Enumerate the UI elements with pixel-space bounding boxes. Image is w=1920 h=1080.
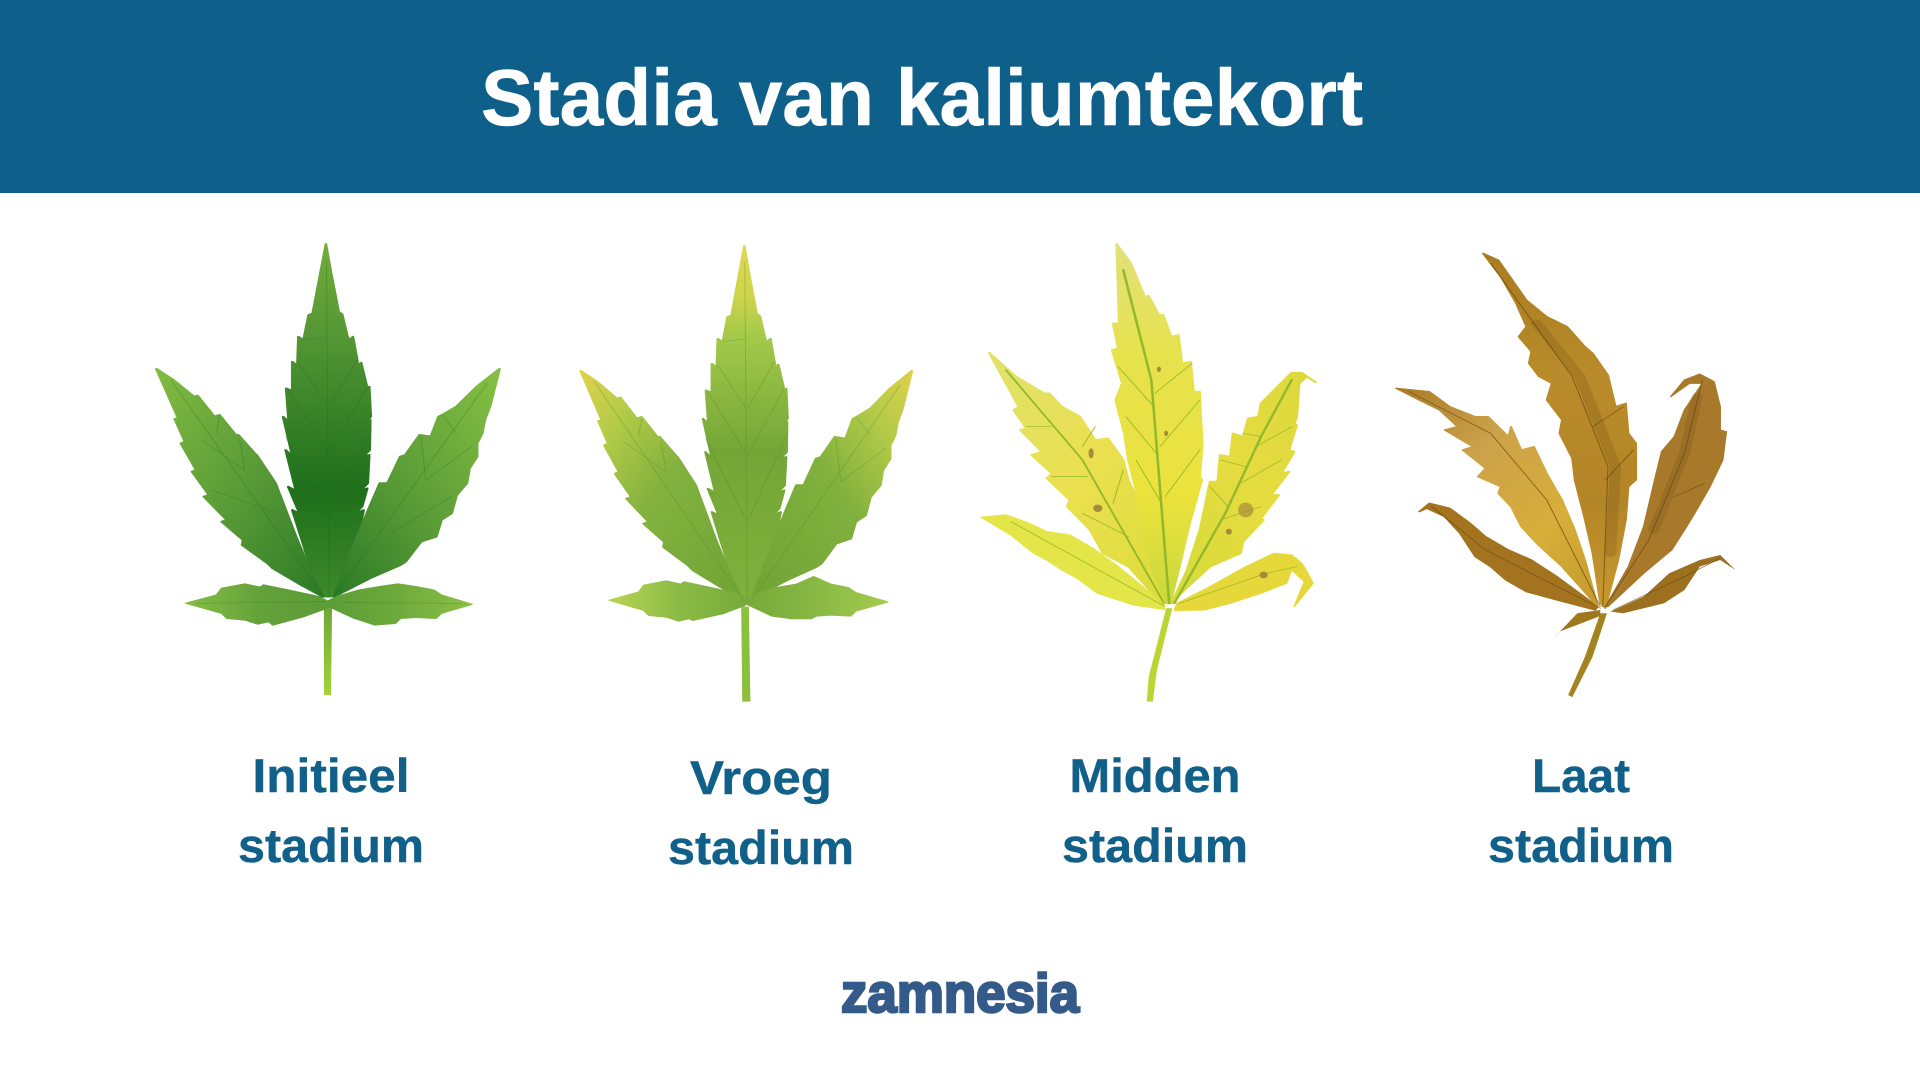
lower right leaflet bbox=[324, 584, 472, 625]
veins bbox=[1409, 263, 1720, 610]
lower right leaflet bbox=[742, 577, 888, 619]
left leaflet bbox=[989, 353, 1165, 603]
lower stub leaflet bbox=[1552, 610, 1600, 640]
lower left leaflet bbox=[981, 515, 1164, 609]
veins bbox=[595, 262, 900, 599]
right leaflet bbox=[1605, 374, 1726, 607]
right leaflet bbox=[334, 369, 499, 597]
label: initial stage bbox=[238, 749, 424, 872]
veins bbox=[1006, 270, 1297, 606]
lower right leaflet bbox=[1611, 555, 1736, 613]
centre leaflet bbox=[1112, 244, 1202, 603]
lower left leaflet bbox=[186, 584, 332, 625]
label: initial stage: stadium bbox=[238, 819, 424, 872]
label: early stage bbox=[668, 751, 854, 874]
centre leaflet bbox=[1483, 253, 1636, 608]
stem bbox=[741, 607, 750, 702]
label: middle stage bbox=[1062, 749, 1248, 872]
label: middle stage: Midden bbox=[1070, 749, 1240, 802]
centre leaflet bbox=[283, 244, 371, 597]
stem bbox=[324, 607, 332, 695]
right leaflet bbox=[752, 371, 912, 599]
title: Stadia van kaliumtekort bbox=[481, 53, 1363, 142]
logo: zamnesia: zamnesia bbox=[841, 962, 1079, 1024]
label: initial stage: Initieel bbox=[252, 749, 410, 802]
header band bbox=[0, 0, 1920, 193]
left leaflet bbox=[1396, 388, 1598, 607]
icon: yellow curling leaf, middle stage bbox=[981, 244, 1316, 702]
label: late stage: stadium bbox=[1488, 819, 1674, 872]
label: late stage bbox=[1488, 749, 1674, 872]
lower right leaflet bbox=[1174, 553, 1313, 611]
icon: lighter green leaf with yellow tips, early stage bbox=[581, 246, 912, 702]
label: late stage: Laat bbox=[1532, 749, 1630, 802]
lower left leaflet bbox=[1419, 503, 1598, 610]
left leaflet bbox=[581, 371, 741, 599]
left leaflet bbox=[157, 369, 323, 597]
label: early stage: Vroeg bbox=[690, 751, 832, 804]
centre leaflet bbox=[703, 246, 788, 599]
stem bbox=[1147, 608, 1172, 702]
brown spots bbox=[1089, 367, 1268, 578]
icon: brown withered leaf, late stage bbox=[1396, 253, 1736, 697]
lower left leaflet bbox=[609, 581, 750, 621]
veins bbox=[171, 260, 487, 603]
icon: green leaf, initial stage bbox=[157, 244, 499, 695]
label: middle stage: stadium bbox=[1062, 819, 1248, 872]
stem bbox=[1568, 613, 1607, 697]
right leaflet bbox=[1172, 373, 1316, 603]
label: early stage: stadium bbox=[668, 821, 854, 874]
